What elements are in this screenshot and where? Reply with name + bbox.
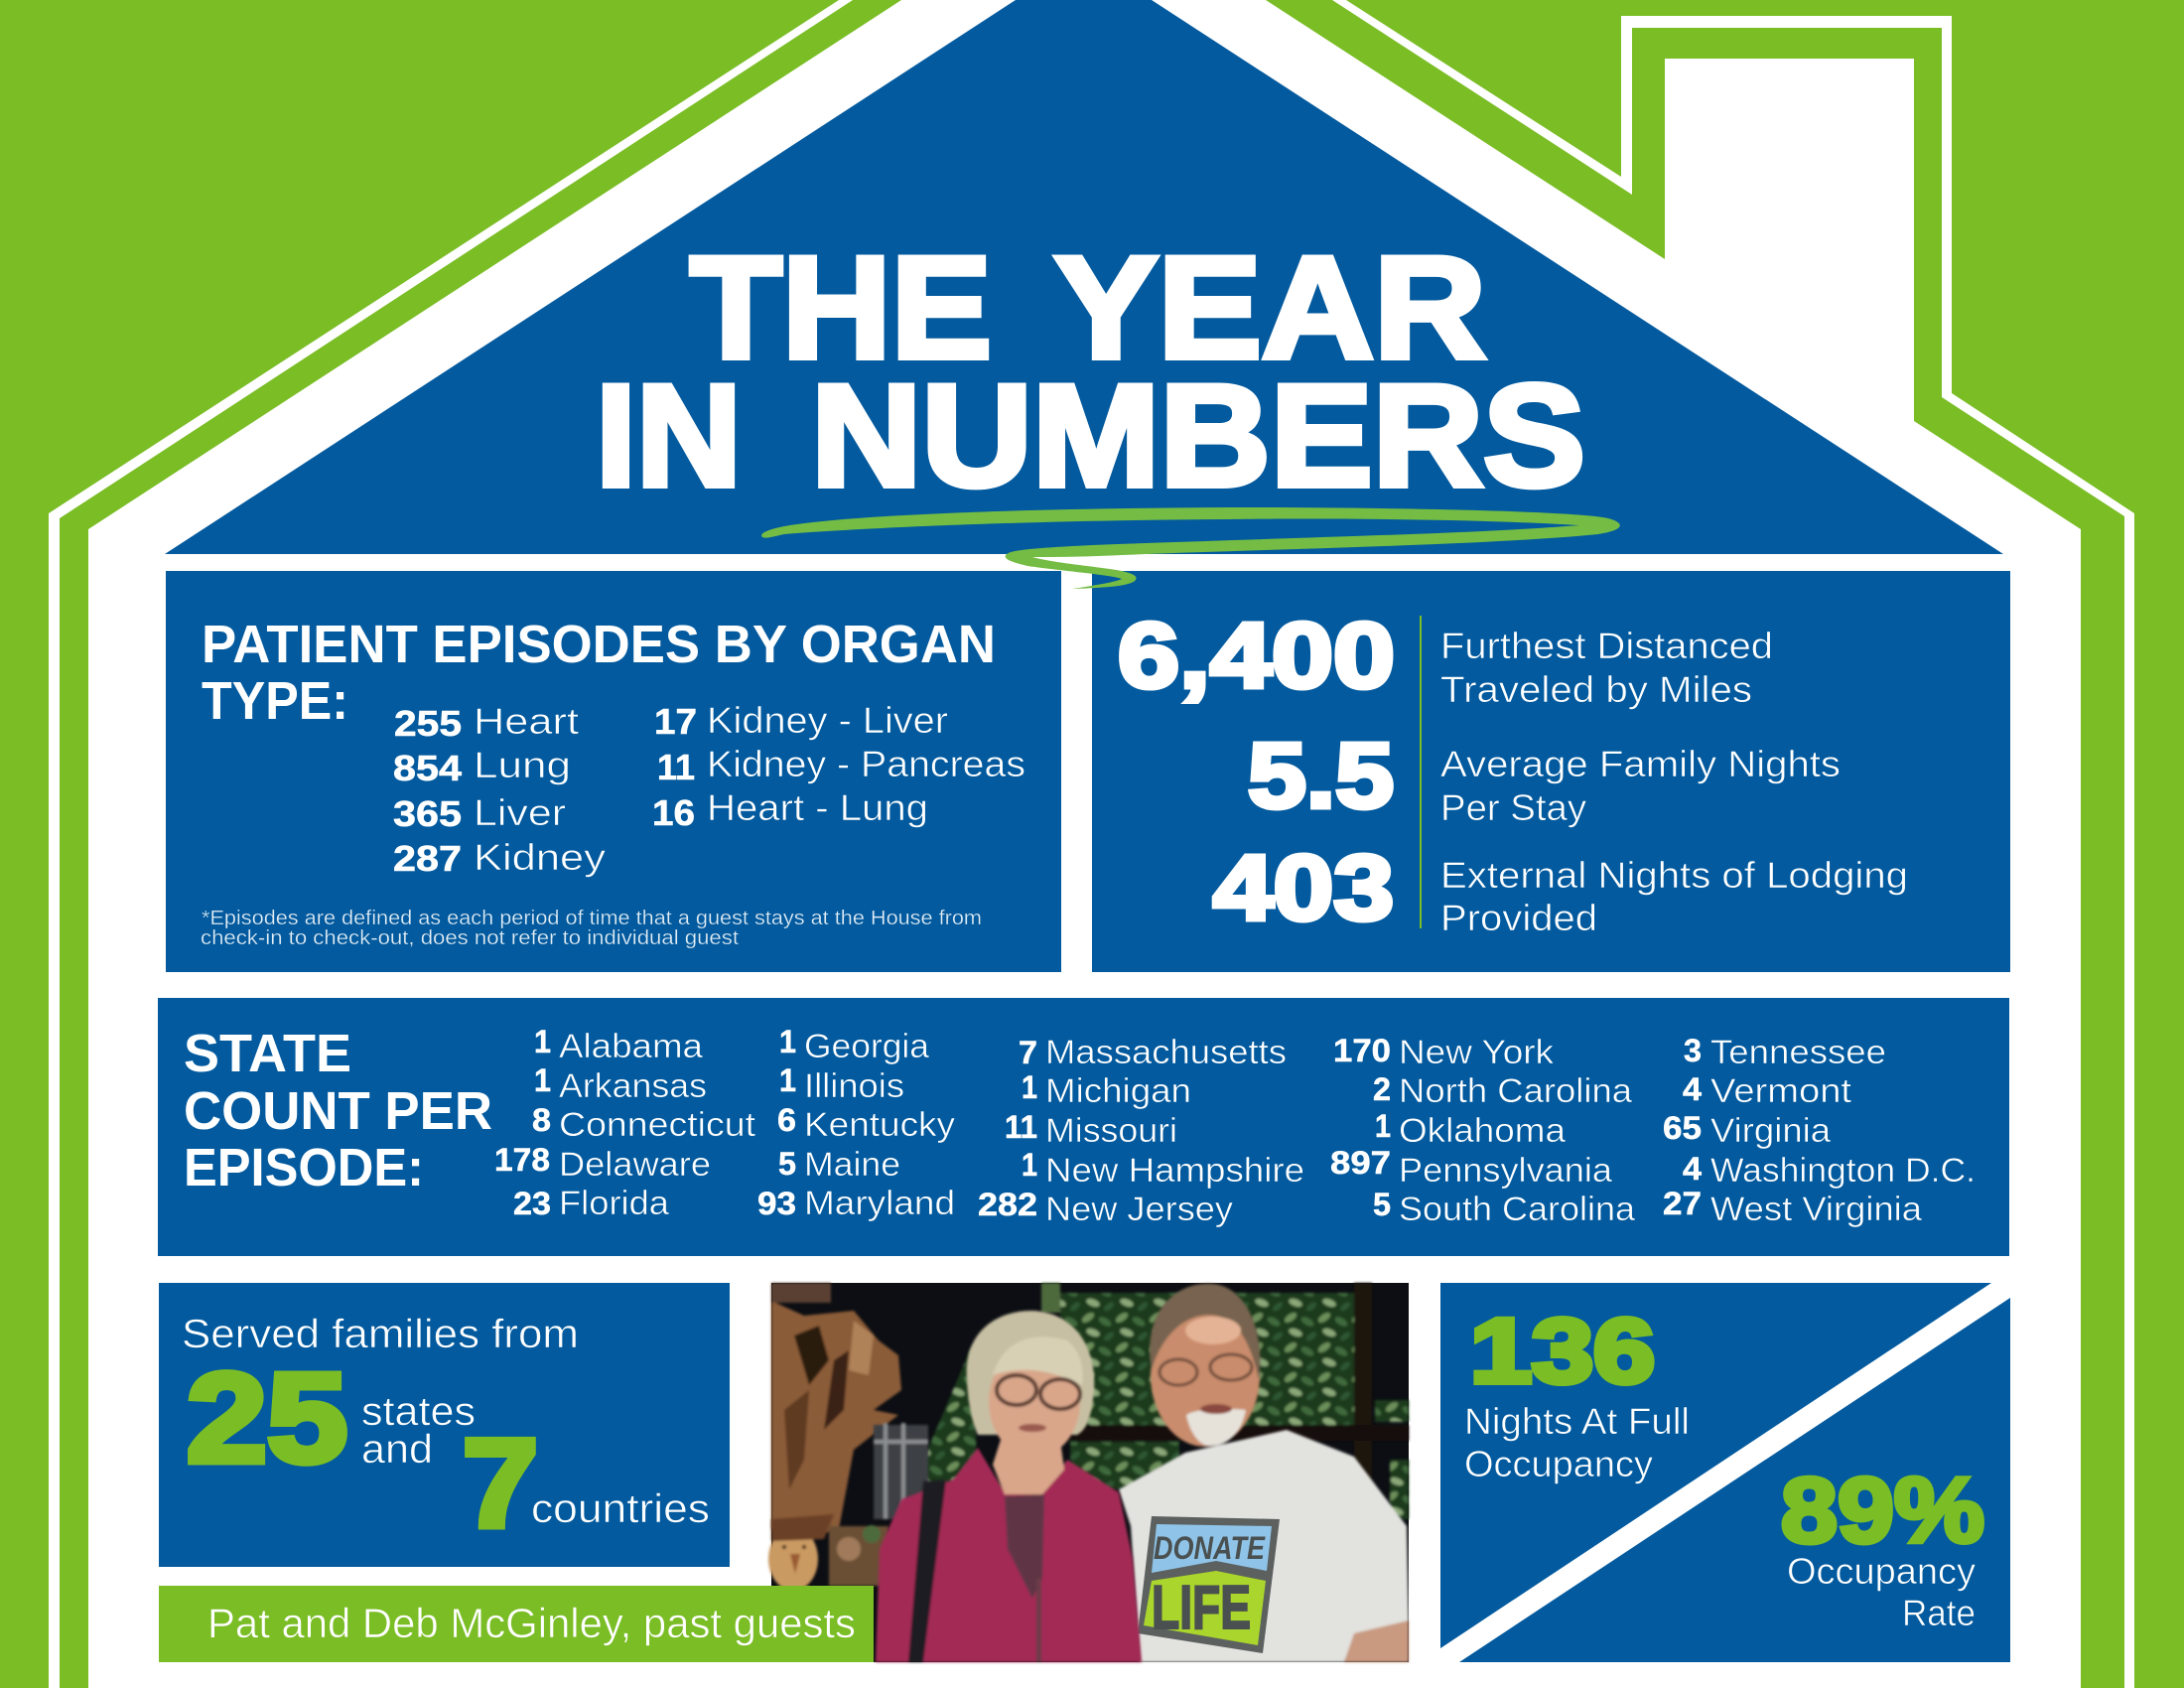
number: 25 states <box>187 1347 476 1489</box>
states column 2: 6 <box>777 1102 796 1138</box>
states column 4: Oklahoma <box>1399 1112 1566 1150</box>
states column 4: North Carolina <box>1399 1072 1632 1110</box>
states column 2: Kentucky <box>804 1106 955 1144</box>
divider line <box>1420 616 1422 928</box>
Donate Life shirt logo <box>1138 1516 1280 1653</box>
states column 2: 1 <box>779 1062 796 1098</box>
heading: patient episodes: TYPE: <box>202 671 348 731</box>
states column 5: 3 <box>1684 1033 1702 1068</box>
organ counts right column <box>652 700 1025 833</box>
organ counts left column: 287 <box>393 838 462 879</box>
panel: occupancy <box>1440 1283 2010 1662</box>
states column 3: New Hampshire <box>1045 1152 1304 1190</box>
states column 1: 178 <box>494 1142 550 1178</box>
triangle: nights at full occupancy: Occupancy <box>1464 1444 1654 1484</box>
states column 3: 1 <box>1022 1147 1037 1183</box>
number: 25 states: and <box>361 1426 433 1472</box>
triangle: occupancy rate: Occupancy <box>1787 1551 1977 1592</box>
states column 4: 1 <box>1375 1108 1391 1144</box>
number: 25 states: 25 <box>187 1347 347 1489</box>
title: YEAR <box>1054 226 1486 388</box>
states column 1: Connecticut <box>559 1106 756 1144</box>
Donate Life shirt logo: DONATE <box>1154 1530 1266 1566</box>
stat: furthest distance: Furthest Distanced <box>1440 626 1773 666</box>
footnote: *Episodes are defined as each period of time that a guest stays at the House from <box>202 908 982 929</box>
states column 5: 4 <box>1683 1151 1702 1187</box>
states column 5: 27 <box>1663 1186 1702 1221</box>
heading: patient episodes: PATIENT EPISODES BY ORGAN <box>202 615 996 674</box>
states column 5: Tennessee <box>1710 1034 1886 1071</box>
states column 4 <box>1330 1033 1635 1228</box>
states column 1: 1 <box>534 1062 551 1098</box>
states column 4: 2 <box>1373 1071 1391 1107</box>
states column 4: 897 <box>1330 1145 1391 1181</box>
number: 25 states: states <box>361 1388 476 1434</box>
fence and flowers <box>829 1423 928 1586</box>
title <box>596 226 1585 516</box>
states column 4: 170 <box>1333 1033 1391 1068</box>
states column 5: 65 <box>1663 1110 1702 1146</box>
organ counts right column: 11 <box>657 747 695 787</box>
caption: past guests <box>159 1586 874 1662</box>
states column 1: 23 <box>513 1186 551 1221</box>
states column 2 <box>757 1024 955 1222</box>
states column 4: New York <box>1399 1034 1555 1071</box>
states column 2: Maine <box>804 1146 900 1184</box>
organ counts left column: 854 <box>393 748 462 788</box>
states column 2: 93 <box>757 1186 796 1221</box>
panel: key stats <box>1092 571 2010 972</box>
blue roof panel <box>165 0 2003 554</box>
states column 3: Michigan <box>1045 1072 1191 1110</box>
number: 7 countries: countries <box>531 1485 710 1531</box>
states column 4: Pennsylvania <box>1399 1152 1612 1190</box>
states column 5: Washington D.C. <box>1710 1152 1976 1190</box>
organ counts left column: Heart <box>474 701 580 742</box>
states column 5: Virginia <box>1710 1112 1831 1150</box>
states column 3: 11 <box>1005 1109 1037 1145</box>
title: IN <box>596 354 742 516</box>
photo: Pat and Deb McGinley <box>768 1283 1409 1662</box>
states column 4: South Carolina <box>1399 1191 1635 1228</box>
text: served families from: Served families from <box>182 1311 579 1356</box>
states column 3: Missouri <box>1045 1112 1177 1150</box>
organ counts right column: 16 <box>652 792 695 833</box>
stat: family nights: Average Family Nights <box>1440 744 1841 784</box>
states column 5: 4 <box>1683 1071 1702 1107</box>
title: THE <box>690 226 992 388</box>
states column 3: Massachusetts <box>1045 1034 1287 1071</box>
states column 5 <box>1663 1033 1976 1228</box>
stat: external nights: 403 <box>1213 836 1394 939</box>
states column 2: Maryland <box>804 1185 955 1222</box>
man <box>1119 1284 1409 1662</box>
organ counts left column <box>393 701 607 879</box>
states column 1: Florida <box>559 1185 669 1222</box>
panel: patient episodes by organ type <box>166 571 1061 972</box>
footnote: check-in to check-out, does not refer to individual guest <box>201 927 739 949</box>
hedge background <box>921 1283 1409 1519</box>
stat: external nights: Provided <box>1440 898 1597 938</box>
heading: state count <box>184 1024 492 1197</box>
number: 7 countries <box>463 1413 710 1553</box>
organ counts right column: 17 <box>654 701 697 742</box>
green swirl underline <box>761 507 1620 589</box>
states column 3: 1 <box>1022 1069 1037 1105</box>
organ counts left column: Kidney <box>474 837 607 878</box>
organ counts left column: 255 <box>394 703 462 744</box>
stat: furthest distance: 6,400 <box>1118 604 1395 707</box>
organ counts left column: Liver <box>474 792 566 833</box>
organ counts left column: Lung <box>474 745 571 785</box>
states column 5: West Virginia <box>1710 1191 1922 1228</box>
heading: state count: EPISODE: <box>184 1138 424 1197</box>
scarecrow face <box>768 1514 834 1591</box>
footnote <box>201 908 982 949</box>
states column 1: 8 <box>532 1102 551 1138</box>
states column 2: Illinois <box>804 1067 904 1105</box>
triangle: nights at full occupancy <box>1440 1283 1991 1648</box>
heading: patient episodes <box>202 615 996 731</box>
dried corn stalks <box>771 1283 901 1539</box>
states column 1: Alabama <box>559 1028 703 1065</box>
states column 2: 1 <box>779 1024 796 1059</box>
states column 1 <box>494 1024 756 1222</box>
woman <box>876 1311 1142 1662</box>
states column 3 <box>978 1034 1304 1228</box>
triangle: occupancy rate: 89% <box>1781 1459 1984 1562</box>
title: NUMBERS <box>811 354 1585 516</box>
triangle: nights at full occupancy: 136 <box>1470 1301 1655 1402</box>
triangle: nights at full occupancy: Nights At Full <box>1464 1401 1690 1442</box>
states column 4: 5 <box>1373 1187 1391 1222</box>
stat: external nights <box>1213 836 1908 939</box>
triangle: occupancy rate <box>1459 1298 2010 1662</box>
states column 3: 282 <box>978 1187 1037 1222</box>
Donate Life shirt logo: LIFE <box>1152 1574 1251 1642</box>
states column 3: 7 <box>1019 1035 1037 1070</box>
heading: state count: COUNT PER <box>184 1081 492 1141</box>
organ counts right column: Kidney - Pancreas <box>707 744 1025 784</box>
triangle: occupancy rate: Rate <box>1902 1593 1976 1633</box>
stat: furthest distance <box>1118 604 1773 710</box>
panel: state count per episode <box>158 998 2009 1256</box>
stat: furthest distance: Traveled by Miles <box>1440 669 1752 710</box>
states column 1: Arkansas <box>559 1067 707 1105</box>
caption: past guests: Pat and Deb McGinley, past guests <box>207 1600 856 1646</box>
number: 7 countries: 7 <box>463 1413 538 1553</box>
states column 1: Delaware <box>559 1146 711 1184</box>
panel: states and countries served <box>159 1283 730 1567</box>
stat: family nights <box>1248 724 1841 828</box>
states column 3: New Jersey <box>1045 1191 1233 1228</box>
stat: external nights: External Nights of Lodging <box>1440 855 1908 896</box>
organ counts left column: 365 <box>393 793 462 834</box>
organ counts right column: Kidney - Liver <box>707 700 948 741</box>
states column 2: Georgia <box>804 1028 929 1065</box>
organ counts right column: Heart - Lung <box>707 787 928 828</box>
heading: state count: STATE <box>184 1024 351 1083</box>
states column 5: Vermont <box>1710 1072 1852 1110</box>
states column 1: 1 <box>534 1024 551 1059</box>
stat: family nights: Per Stay <box>1440 787 1587 828</box>
states column 2: 5 <box>778 1146 796 1182</box>
stat: family nights: 5.5 <box>1248 724 1394 827</box>
